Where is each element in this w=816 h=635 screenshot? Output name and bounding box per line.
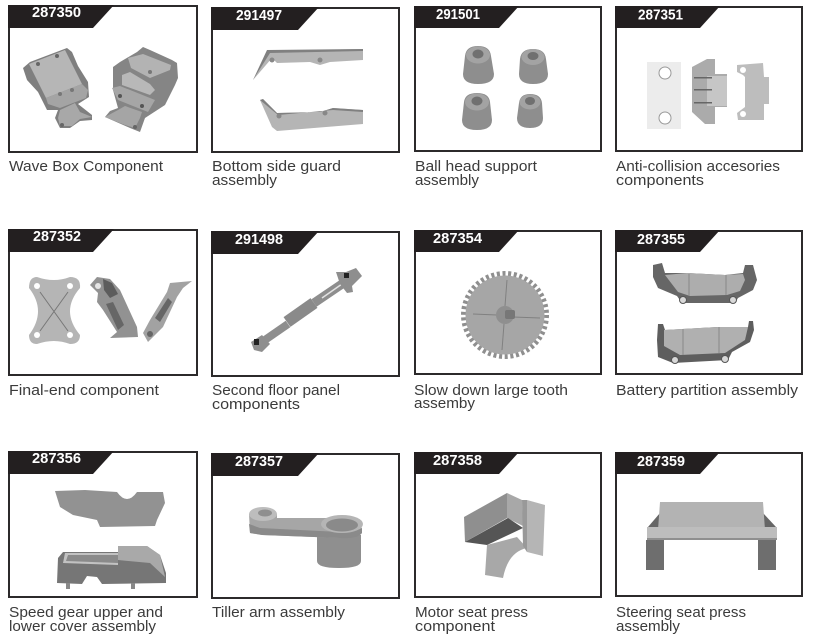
panel: 287354 slow down large tooth assembly xyxy=(414,230,601,374)
part number 287358: 287358 xyxy=(433,453,482,469)
caption row 2: Second floor panel xyxy=(212,382,340,399)
part number 287355: 287355 xyxy=(637,232,685,248)
caption row 3: assembly xyxy=(616,618,681,635)
panel: 287350 wave box component xyxy=(8,5,197,152)
icon: four rubber supports xyxy=(462,46,548,130)
caption row 3: Motor seat press xyxy=(415,604,528,621)
panel: 287358 motor seat press component xyxy=(414,452,601,597)
caption row 2: Battery partition assembly xyxy=(616,382,799,399)
caption row 3: lower cover assembly xyxy=(9,618,157,635)
icon: large gear xyxy=(464,274,546,356)
caption row 1: assembly xyxy=(415,172,480,189)
caption row 3 xyxy=(9,604,746,635)
caption row 2: assemby xyxy=(414,395,475,412)
caption row 3: Tiller arm assembly xyxy=(212,604,346,621)
caption row 3: Steering seat press xyxy=(616,604,746,621)
icon: end plate and brackets xyxy=(29,277,192,344)
caption row 1: assembly xyxy=(212,172,278,189)
caption row 1: Bottom side guard xyxy=(212,158,341,175)
caption row 2 xyxy=(9,382,799,413)
part number 287350: 287350 xyxy=(32,5,81,21)
icon: plate and brackets xyxy=(647,59,769,129)
caption row 2: components xyxy=(212,396,300,413)
part number 291498: 291498 xyxy=(235,232,283,248)
panel: 291501 ball head support assembly xyxy=(414,6,601,151)
caption row 1: components xyxy=(616,172,704,189)
panel: 287351 anti-collision accessories components xyxy=(615,6,802,151)
part number 287352: 287352 xyxy=(33,229,81,245)
caption row 1 xyxy=(9,158,780,189)
icon: steering seat press xyxy=(646,502,777,570)
panel: 287352 final-end component xyxy=(8,229,197,375)
icon: gear covers xyxy=(55,490,166,589)
caption row 3: Speed gear upper and xyxy=(9,604,163,621)
caption row 1: Anti-collision accesories xyxy=(616,158,780,175)
panel: 287356 speed gear upper and lower cover assembly xyxy=(8,451,197,597)
icon: side guards xyxy=(253,49,363,131)
icon: battery partitions xyxy=(653,263,757,364)
icon: motor seat press xyxy=(464,493,545,578)
caption row 1: Wave Box Component xyxy=(9,158,164,175)
icon: wave box parts xyxy=(23,47,178,132)
part number 287351: 287351 xyxy=(638,8,683,24)
panel: 287357 tiller arm assembly xyxy=(211,453,399,598)
panel: 291497 bottom side guard assembly xyxy=(211,7,399,152)
panel: 287355 battery partition assembly xyxy=(615,230,802,374)
caption row 1: Ball head support xyxy=(415,158,538,175)
part number 287354: 287354 xyxy=(433,231,482,247)
part number 287357: 287357 xyxy=(235,454,283,470)
panel: 291498 second floor panel components xyxy=(211,231,399,376)
part number 287359: 287359 xyxy=(637,454,685,470)
caption row 2: Slow down large tooth xyxy=(414,382,568,399)
icon: connecting rod xyxy=(251,268,362,352)
part number 291501: 291501 xyxy=(436,7,480,23)
part number 287356: 287356 xyxy=(32,451,81,467)
panel: 287359 steering seat press assembly xyxy=(615,452,802,596)
part number 291497: 291497 xyxy=(236,8,282,24)
icon: tiller arm xyxy=(249,507,363,568)
caption row 2: Final-end component xyxy=(9,382,160,399)
caption row 3: component xyxy=(415,618,496,635)
